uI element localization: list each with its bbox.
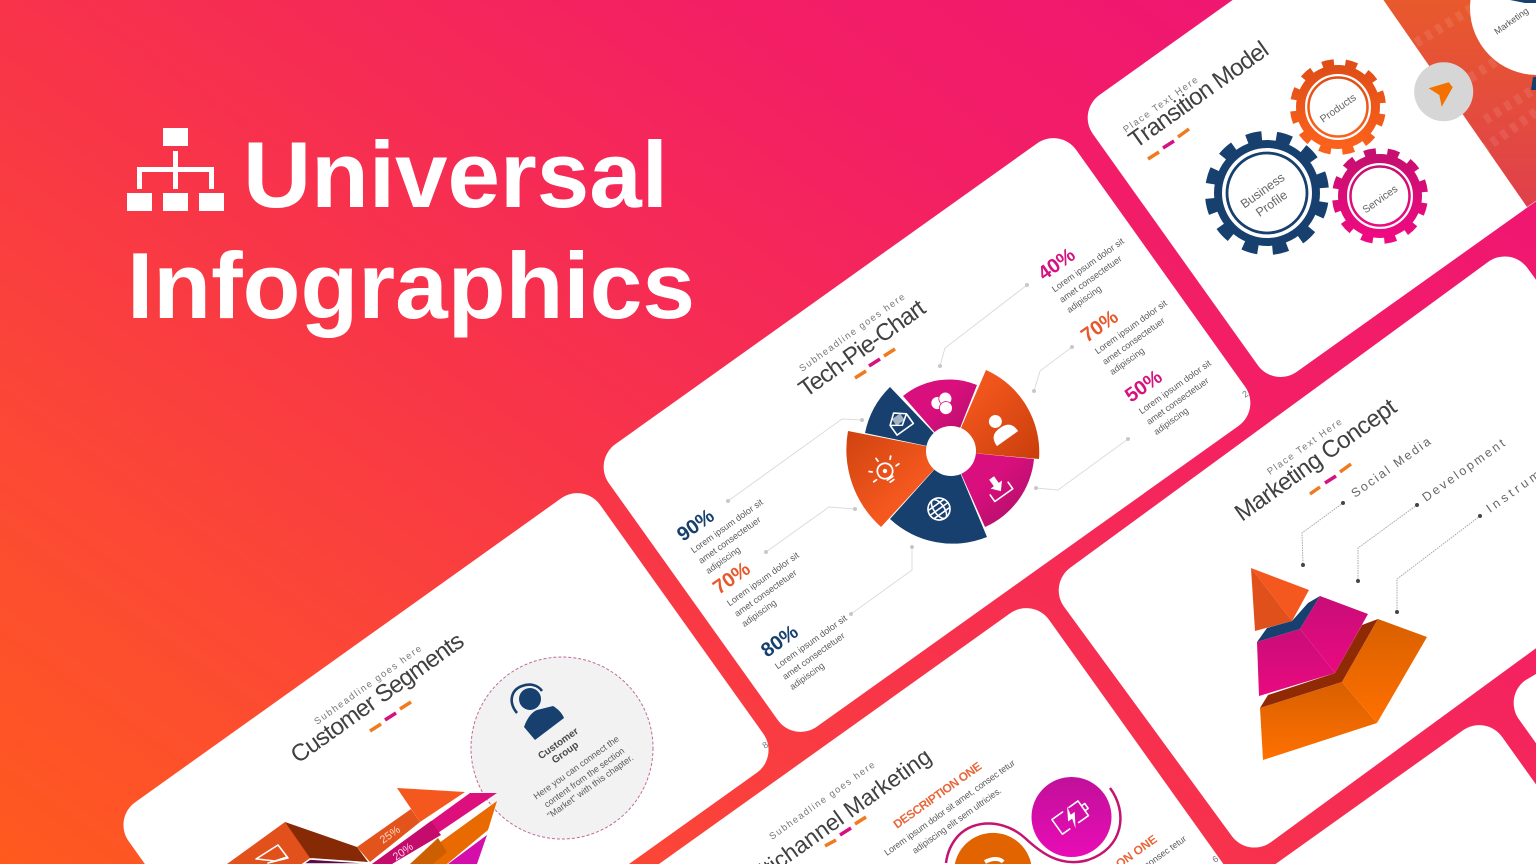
stat: 70% left: adipiscing	[740, 597, 778, 629]
customer group label: Group	[550, 740, 581, 766]
stat: 90%: amet consectetuer	[697, 515, 763, 566]
stat: 40%: 40%	[1034, 244, 1080, 285]
accent dashes	[1148, 129, 1189, 159]
white circle with label: Marketing	[1492, 6, 1530, 37]
stat: 40%: amet consectetuer	[1058, 254, 1124, 305]
panel: multichannel marketing slide	[659, 608, 1223, 864]
gear: business profile	[1210, 136, 1324, 250]
accent dashes	[1310, 464, 1351, 494]
page number: 8	[760, 740, 770, 751]
slide background	[123, 493, 769, 864]
leader lines	[726, 283, 1130, 616]
title	[127, 122, 695, 338]
stat: 80%: Lorem ipsum dolor sit	[773, 613, 849, 671]
dotted leader lines	[1301, 501, 1482, 614]
stat: 80%	[757, 593, 864, 693]
customer group label: Customer	[536, 726, 581, 762]
stat: 70% left: 70%	[709, 558, 755, 599]
stat: 50%: adipiscing	[1152, 405, 1190, 437]
panel: customer segments slide	[123, 493, 770, 864]
icon: download tray	[983, 472, 1013, 502]
3D arrow chart: 20%	[391, 841, 416, 863]
panel: background slides bottom right	[1276, 674, 1536, 864]
icon: person with headset	[512, 685, 564, 740]
accent dashes	[370, 702, 411, 731]
panel: tech pie chart slide	[593, 127, 1261, 743]
3D arrow chart	[227, 788, 497, 864]
panel: marketing concept slide	[1048, 245, 1536, 859]
marketing subheading: Place Text Here	[1265, 417, 1344, 477]
stat: 70% left: Lorem ipsum dolor sit	[725, 550, 801, 608]
multichannel subheading: Subheadline goes here	[767, 760, 877, 842]
gear: services: Services	[1360, 183, 1400, 216]
arrow percent labels: 25%	[378, 824, 403, 846]
icon: globe	[924, 494, 954, 524]
layer labels	[1349, 434, 1536, 515]
pie subheading: Subheadline goes here	[797, 292, 907, 374]
stat: 90%: 90%	[673, 505, 719, 546]
page number: 2	[1240, 389, 1250, 400]
slide background	[1048, 245, 1536, 859]
photo panel	[1380, 0, 1536, 207]
stat: 80%: 80%	[757, 621, 803, 662]
magenta circle with battery icon	[1032, 777, 1112, 857]
transition heading: Transition Model	[1124, 36, 1274, 154]
pie chart	[846, 370, 1039, 544]
stat: 50%: Lorem ipsum dolor sit	[1137, 358, 1213, 416]
gear: products: Products	[1318, 92, 1359, 125]
stat: 70% right: adipiscing	[1108, 345, 1146, 377]
icon: phone waves	[985, 859, 1003, 862]
icon: battery bolt	[1051, 797, 1093, 837]
stat: 70% left	[709, 530, 816, 630]
slide background	[593, 127, 1261, 743]
slide background	[1077, 0, 1536, 388]
description one: DESCRIPTION ONE	[891, 759, 984, 831]
stat: 40%: adipiscing	[1065, 283, 1103, 315]
description two	[1113, 832, 1188, 864]
gear: products	[1294, 64, 1382, 150]
layer labels: Social Media	[1349, 434, 1433, 500]
stat: 50%: amet consectetuer	[1145, 376, 1211, 427]
stat: 50%	[1121, 338, 1228, 438]
gear: business profile: Profile	[1253, 188, 1290, 220]
icon: overlapping circles	[928, 389, 959, 419]
3D pyramid	[1251, 568, 1427, 760]
icon: envelope	[885, 407, 913, 435]
stat: 50%: 50%	[1121, 366, 1167, 407]
stat: 70% right: Lorem ipsum dolor sit	[1093, 298, 1169, 356]
stat: 90%	[673, 477, 780, 577]
customer group description: "Market" with this chapter.	[545, 752, 635, 821]
stat: 70% right: 70%	[1077, 306, 1123, 347]
pie heading: Tech-Pie-Chart	[794, 294, 931, 403]
panel: transition model slide	[1077, 0, 1536, 388]
customer group circle	[471, 657, 653, 839]
customer segments heading: Customer Segments	[286, 627, 469, 769]
stat: 90%: adipiscing	[704, 544, 742, 576]
customer segments subheading: Subheadline goes here	[312, 644, 424, 727]
stat: 80%: amet consectetuer	[781, 631, 847, 682]
stat: 70% right: amet consectetuer	[1101, 316, 1167, 367]
customer group description: content from the section	[542, 746, 626, 810]
transition subheading: Place Text Here	[1121, 75, 1200, 135]
stat: 80%: adipiscing	[788, 660, 826, 692]
layer labels: Development	[1420, 436, 1508, 504]
description one: Lorem ipsum dolor sit amet, consec tetur	[882, 758, 1017, 858]
accent dashes	[825, 817, 866, 846]
gear: business profile: Business	[1238, 170, 1287, 211]
icon: light bulb	[864, 450, 905, 490]
customer group description	[532, 734, 635, 821]
icon: envelope	[256, 845, 288, 863]
accent dashes	[855, 349, 895, 378]
flow curve	[946, 788, 1120, 863]
customer group description: Here you can connect the	[532, 734, 621, 801]
navigation arrow badge	[1414, 62, 1473, 121]
icon: organization hierarchy	[127, 128, 224, 211]
orange circle with icon	[955, 833, 1031, 864]
title: Universal	[243, 122, 668, 227]
gear: services	[1336, 152, 1424, 240]
description one: adipiscing elit sem ultricies.	[910, 785, 1003, 856]
title: Infographics	[127, 233, 695, 338]
slide background	[659, 608, 1223, 864]
stat: 70% right	[1077, 278, 1184, 378]
stat: 40%	[1034, 216, 1141, 316]
stat: 90%: Lorem ipsum dolor sit	[689, 497, 765, 555]
stat: 40%: Lorem ipsum dolor sit	[1050, 236, 1126, 294]
marketing heading: Marketing Concept	[1230, 393, 1402, 527]
white circle with label	[1470, 0, 1536, 90]
stat: 70% left: amet consectetuer	[733, 568, 799, 619]
icon: person	[981, 409, 1018, 446]
